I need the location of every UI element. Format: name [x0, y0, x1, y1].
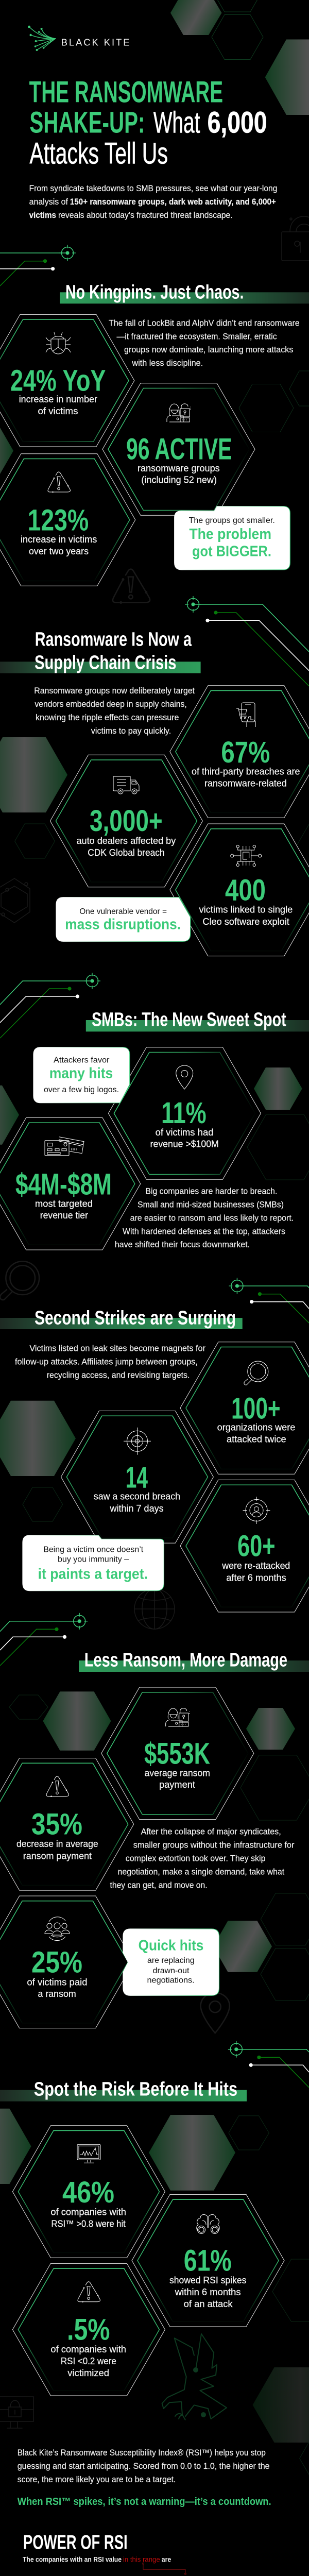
panel: .5%: victimized [67, 2368, 109, 2378]
text block: RSI explanation: When RSI™ spikes, it’s not a warning—it’s a countdown. [18, 2496, 271, 2507]
panel: 24% YoY: of victims [38, 406, 78, 416]
circuit lines: section 2 [185, 596, 309, 686]
panel: 96 ACTIVE: ransomware groups [138, 463, 220, 473]
heading: Power of RSI: The companies with an RSI value [23, 2555, 122, 2563]
section heading: Supply Chain Crisis: Ransomware Is Now a [35, 629, 192, 650]
callout: problem got bigger [175, 506, 290, 570]
text block: SMBs: are easier to ransom and less likely to report. [130, 1213, 294, 1223]
panel: 60+: were re-attacked [221, 1561, 290, 1571]
panel: 46% [12, 2126, 165, 2258]
panel: 35%: decrease in average [16, 1839, 98, 1849]
title: What [153, 106, 200, 139]
panel: 3,000+: auto dealers affected by [76, 836, 176, 846]
callout: quick hits: Quick hits [139, 1938, 203, 1954]
text block: RSI explanation: score, the more likely you are to be a target. [18, 2475, 176, 2484]
icon: target [124, 1428, 151, 1455]
icon: eagle [162, 2334, 227, 2420]
panel: 25%: 25% [31, 1945, 82, 1979]
panel: 61%: 61% [184, 2244, 232, 2277]
text block: second strikes: Victims listed on leak sites become magnets for [29, 1344, 205, 1353]
panel: 96 ACTIVE [102, 383, 255, 515]
panel: 61%: showed RSI spikes [169, 2275, 246, 2285]
icon: truck [113, 776, 139, 794]
panel: 35% [0, 1758, 134, 1890]
section heading: Spot the Risk: Spot the Risk Before It Hits [34, 2079, 237, 2100]
callout: many hits [33, 1047, 130, 1103]
callout: many hits: many hits [49, 1065, 113, 1082]
icon: magnifier [244, 1361, 268, 1385]
panel: 46%: of companies with [50, 2207, 126, 2217]
text block: collapse of syndicates: smaller groups without the infrastructure for [133, 1841, 295, 1850]
panel: 100+: attacked twice [227, 1434, 286, 1444]
circuit lines: section 1 [0, 245, 76, 286]
circuit lines: section 5 [0, 1613, 88, 1666]
icon: chip [231, 845, 262, 867]
text block: fall of LockBit: with less discipline. [131, 359, 203, 368]
intro text [29, 184, 277, 220]
circuit lines: section 6 [228, 2041, 309, 2088]
text block: SMBs [115, 1187, 294, 1249]
panel: 25%: of victims paid [27, 1977, 88, 1987]
text block: fall of LockBit: groups now dominate, launching more attacks [124, 345, 293, 354]
icon: warning [78, 2282, 100, 2302]
panel: 67%: 67% [221, 736, 270, 769]
panel: 24% YoY: increase in number [19, 394, 97, 404]
panel: 60+: after 6 months [226, 1572, 286, 1583]
callout: paints a target: it paints a target. [38, 1566, 148, 1582]
panel: 123%: increase in victims [21, 534, 97, 545]
panel: 96 ACTIVE: (including 52 new) [141, 475, 217, 485]
text block: collapse of syndicates: negotiation, make a single demand, take what [117, 1868, 285, 1877]
heading: Power of RSI: are [162, 2555, 171, 2563]
panel: 3,000+: 3,000+ [90, 804, 163, 838]
intro text: reveals about today’s fractured threat landscape. [58, 211, 233, 220]
section heading: Supply Chain Crisis: Supply Chain Crisis [35, 652, 176, 673]
section heading: No Kingpins: No Kingpins. Just Chaos. [65, 281, 244, 303]
panel: $553K: average ransom [144, 1768, 210, 1778]
text block: collapse of syndicates [110, 1827, 295, 1890]
callout: mass disruptions: mass disruptions. [65, 916, 181, 933]
intro text: From syndicate takedowns to SMB pressures, see what our year-long [29, 184, 277, 193]
panel: $4M-$8M [0, 1117, 141, 1250]
callout: paints a target: Being a victim once doesn’t [43, 1545, 144, 1554]
callout: problem got bigger: The groups got smaller. [189, 516, 275, 525]
callout: quick hits: are replacing [147, 1956, 195, 1965]
panel: $4M-$8M: most targeted [35, 1198, 93, 1209]
panel: 25% [0, 1896, 134, 2028]
panel: 123% [0, 454, 135, 586]
text block: collapse of syndicates: After the collapse of major syndicates, [141, 1827, 281, 1837]
text block: second strikes [15, 1344, 205, 1380]
text block: collapse of syndicates: complex extortion took over. They skip [126, 1854, 266, 1863]
callout: quick hits [123, 1929, 219, 1995]
panel: 11%: 11% [161, 1096, 207, 1130]
panel: 100+: 100+ [231, 1392, 281, 1425]
panel: 400: 400 [225, 873, 266, 907]
heading: Power of RSI: in this range [123, 2555, 160, 2563]
icon: bug [46, 332, 71, 354]
intro text: analysis of [29, 197, 68, 207]
text block: collapse of syndicates: they can get, and move on. [110, 1880, 208, 1890]
title: Attacks Tell Us [29, 137, 168, 170]
heading: Power of RSI: POWER OF RSI [23, 2531, 128, 2553]
text block: supply chain: Ransomware groups now deliberately target [34, 686, 195, 696]
panel: .5%: of companies with [50, 2344, 126, 2354]
logo: Black Kite header [28, 26, 130, 51]
text block: fall of LockBit: The fall of LockBit and AlphV didn’t end ransomware [109, 318, 300, 328]
panel: 60+ [180, 1480, 309, 1612]
panel: 46%: 46% [62, 2176, 114, 2209]
text block: second strikes: follow-up attacks. Affiliates jump between groups, [15, 1357, 198, 1366]
callout: many hits: over a few big logos. [44, 1086, 119, 1094]
title [29, 75, 267, 170]
panel: 24% YoY: 24% YoY [10, 364, 106, 398]
icon: warning [46, 1776, 68, 1797]
panel: 100+: organizations were [217, 1422, 295, 1433]
circuit lines: section 4 [229, 1278, 309, 1323]
heading: Power of RSI [23, 2531, 171, 2563]
panel: 123%: over two years [29, 546, 89, 556]
text block: supply chain: vendors embedded deep in supply chains, [35, 700, 187, 709]
panel: 14 [61, 1411, 213, 1543]
panel: 400: victims linked to single [199, 905, 293, 915]
icon: people [45, 1917, 70, 1940]
text block: supply chain [34, 686, 195, 736]
panel: .5%: .5% [67, 2313, 110, 2347]
panel: 61% [132, 2194, 284, 2327]
panel: 11%: of victims had [156, 1127, 213, 1138]
icon: map pin [176, 1065, 193, 1089]
text block: SMBs: have shifted their focus downmarket. [115, 1240, 250, 1249]
text block: SMBs: With hardened defenses at the top, attackers [123, 1227, 285, 1236]
panel: $4M-$8M: revenue tier [40, 1210, 88, 1221]
panel: .5%: RSI <0.2 were [61, 2356, 116, 2366]
callout: problem got bigger: got BIGGER. [192, 543, 271, 560]
panel: 123%: 123% [28, 503, 89, 537]
panel: 11% [108, 1047, 261, 1179]
icon: hacker and lock [167, 404, 191, 422]
panel: 400 [170, 824, 309, 956]
panel: 61%: within 6 months [175, 2287, 241, 2297]
callout: paints a target: buy you immunity – [58, 1555, 129, 1564]
text block: supply chain: knowing the ripple effects can pressure [36, 713, 179, 722]
text block: supply chain: victims to pay quickly. [91, 726, 171, 736]
text block: RSI explanation: guessing and start anticipating. Scored from 0.0 to 1.0, the higher the [18, 2462, 269, 2471]
text block: fall of LockBit [109, 318, 300, 368]
panel: 60+: 60+ [237, 1530, 276, 1563]
panel: 96 ACTIVE: 96 ACTIVE [126, 433, 232, 466]
section heading: Supply Chain Crisis [0, 629, 201, 673]
icon: phone and cart [236, 703, 255, 727]
panel: 61%: of an attack [184, 2299, 233, 2309]
panel: $553K: $553K [144, 1737, 210, 1770]
chart: RSI scale bar [18, 2563, 224, 2576]
logo: Black Kite header: BLACK KITE [61, 37, 130, 47]
panel: 24% YoY [0, 314, 134, 447]
text block: RSI explanation [18, 2448, 271, 2507]
panel: 100+ [180, 1342, 309, 1474]
panel: 14: within 7 days [109, 1503, 164, 1514]
title: 6,000 [208, 106, 267, 139]
panel: 67% [170, 686, 309, 818]
panel: 11%: revenue >$100M [150, 1139, 219, 1149]
panel: 25%: a ransom [38, 1989, 76, 1999]
panel: 14: 14 [126, 1461, 148, 1494]
panel: 35%: ransom payment [23, 1851, 92, 1861]
panel: $553K: payment [159, 1780, 195, 1790]
panel: $553K [101, 1687, 254, 1820]
callout: problem got bigger: The problem [189, 526, 271, 543]
section heading: Second Strikes: Second Strikes are Surging [35, 1308, 236, 1329]
icon: hacker and lock [166, 1708, 190, 1726]
intro text: 150+ ransomware groups, dark web activity, and 6,000+ [70, 197, 276, 207]
callout: many hits: Attackers favor [54, 1056, 110, 1065]
circuit lines: section 3 [0, 973, 100, 1038]
icon: brain [197, 2214, 219, 2234]
intro text: victims [29, 211, 56, 220]
panel: 46%: RSI™ >0.8 were hit [52, 2219, 126, 2229]
text block: fall of LockBit: —it fractured the ecosystem. Smaller, erratic [116, 332, 277, 341]
text block: SMBs: Big companies are harder to breach. [145, 1187, 277, 1196]
panel: 3,000+: CDK Global breach [88, 848, 165, 858]
callout: paints a target [23, 1535, 164, 1591]
panel: 35%: 35% [31, 1808, 82, 1841]
callout: mass disruptions [56, 897, 191, 941]
callout: quick hits: drawn-out [153, 1967, 190, 1975]
callout: quick hits: negotiations. [147, 1976, 195, 1985]
panel: .5% [12, 2263, 165, 2396]
callout: mass disruptions: One vulnerable vendor = [79, 907, 167, 916]
text block: SMBs: Small and mid-sized businesses (SMBs) [138, 1200, 284, 1209]
panel: 400: Cleo software exploit [202, 917, 289, 927]
text block: RSI explanation: Black Kite’s Ransomware Susceptibility Index® (RSI™) helps you stop [18, 2448, 266, 2458]
panel: 67%: ransomware-related [204, 778, 287, 789]
icon: warning [48, 472, 70, 493]
title: SHAKE-UP: [29, 106, 145, 139]
icon: monitor [77, 2144, 100, 2163]
panel: $4M-$8M: $4M-$8M [15, 1167, 112, 1201]
panel: 67%: of third-party breaches are [192, 766, 300, 776]
panel: 14: saw a second breach [94, 1492, 180, 1502]
icon: person target [243, 1497, 270, 1524]
icon: cards [45, 1137, 84, 1156]
panel: 3,000+ [50, 755, 202, 887]
text block: second strikes: recycling access, and revisiting targets. [47, 1370, 190, 1380]
